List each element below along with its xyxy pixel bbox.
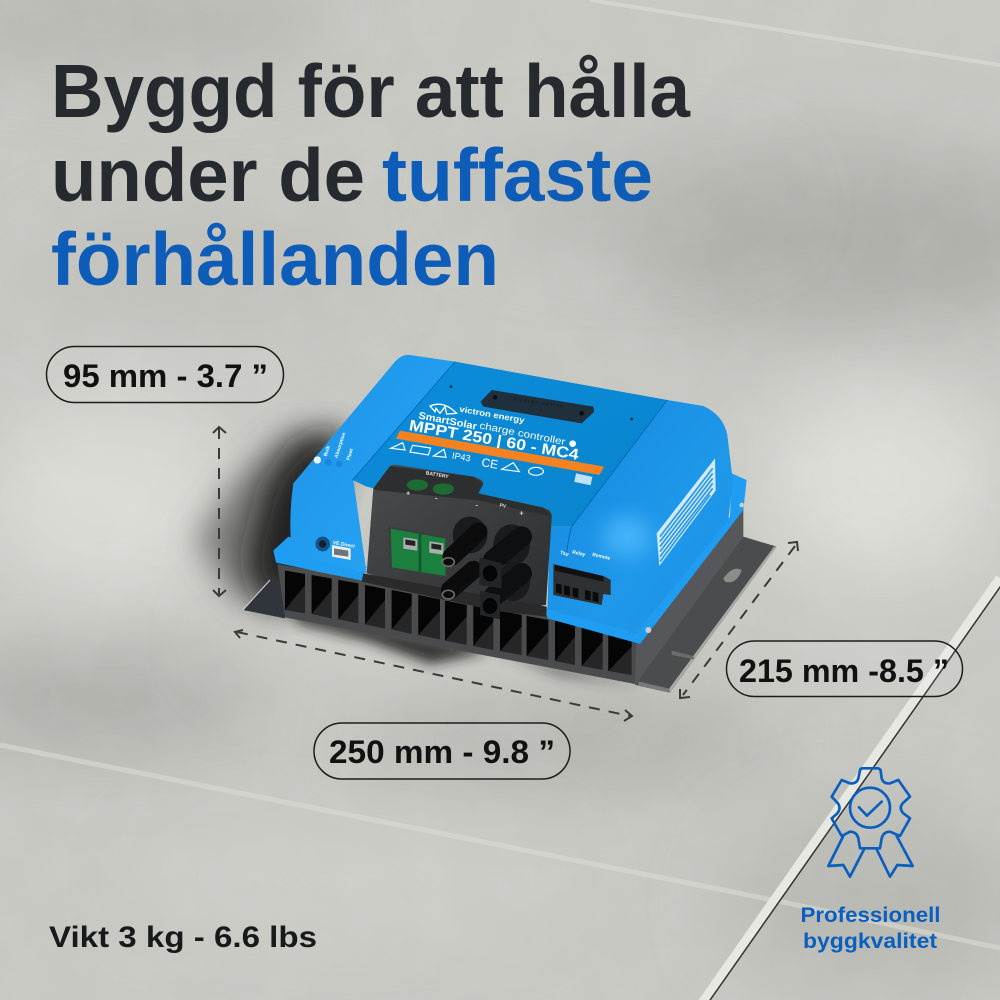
compliance marks: IP43 — [451, 450, 471, 464]
display cover — [450, 385, 633, 423]
enclosure right section — [547, 400, 733, 633]
brand and model printing: SmartSolar — [417, 410, 478, 433]
shell highlight — [603, 517, 650, 557]
compliance marks — [391, 443, 592, 485]
label: length 250 mm: 250 mm - 9.8 ” — [329, 734, 555, 770]
brand and model printing: victron energy — [459, 404, 526, 425]
dimension arrow: length — [235, 630, 632, 721]
display cover: display option — [513, 396, 564, 410]
badge caption: byggkvalitet — [803, 929, 937, 953]
brand and model printing: charge controller — [478, 420, 567, 448]
mounting plate — [243, 537, 777, 693]
title: tuffaste — [382, 133, 653, 217]
product: solar charge controller — [243, 355, 777, 693]
status leds — [314, 432, 355, 467]
dimension arrow: width — [680, 542, 798, 698]
label: width 215 mm — [726, 641, 962, 696]
label: height 95 mm: 95 mm - 3.7 ” — [63, 358, 268, 394]
title: Byggd för att hålla — [51, 49, 691, 133]
badge caption: Professionell — [800, 903, 940, 927]
usb port and dial: VE.Direct — [332, 540, 356, 550]
vent label — [657, 458, 716, 566]
device cast shadow — [195, 432, 640, 686]
battery and pv terminal housing — [362, 465, 552, 617]
label: width 215 mm: 215 mm -8.5 ” — [739, 653, 949, 689]
compliance marks: CE — [480, 455, 499, 472]
heatsink fins — [277, 507, 743, 685]
MC4 solar connectors — [442, 517, 530, 619]
control terminal block: Tsp — [560, 550, 569, 558]
brand and model printing: MPPT 250 | 60 - MC4 — [408, 417, 581, 464]
battery and pv terminal housing: + — [406, 489, 410, 498]
status leds: Absorption — [334, 432, 347, 459]
battery and pv terminal housing: - — [435, 494, 438, 503]
enclosure seam lines — [353, 362, 667, 553]
control terminal block — [553, 549, 611, 605]
battery and pv terminal housing: + — [519, 509, 524, 518]
title — [51, 49, 691, 301]
dimension arrow: height — [213, 427, 226, 596]
control terminal block: Relay — [572, 549, 586, 558]
label: length 250 mm — [314, 723, 570, 779]
battery and pv terminal housing: - — [476, 500, 479, 509]
usb port and dial — [315, 537, 356, 560]
enclosure top panel — [353, 362, 667, 527]
title: förhållanden — [51, 217, 499, 301]
badge caption — [800, 903, 940, 953]
title: under de — [51, 133, 365, 217]
status leds: Float — [346, 448, 355, 461]
orange band — [396, 431, 604, 475]
brand and model printing — [408, 404, 581, 464]
control terminal block: Remote — [592, 552, 611, 562]
label: height 95 mm — [46, 346, 284, 402]
enclosure left section — [290, 355, 455, 573]
green battery connector — [388, 526, 447, 578]
weight text: Vikt 3 kg - 6.6 lbs — [49, 921, 317, 954]
icon: quality badge gear with ribbons — [828, 768, 913, 877]
battery and pv terminal housing: BATTERY — [425, 470, 450, 480]
battery and pv terminal housing: PV — [499, 503, 507, 510]
blue flange — [273, 473, 747, 644]
status leds: Bulk — [323, 445, 332, 457]
